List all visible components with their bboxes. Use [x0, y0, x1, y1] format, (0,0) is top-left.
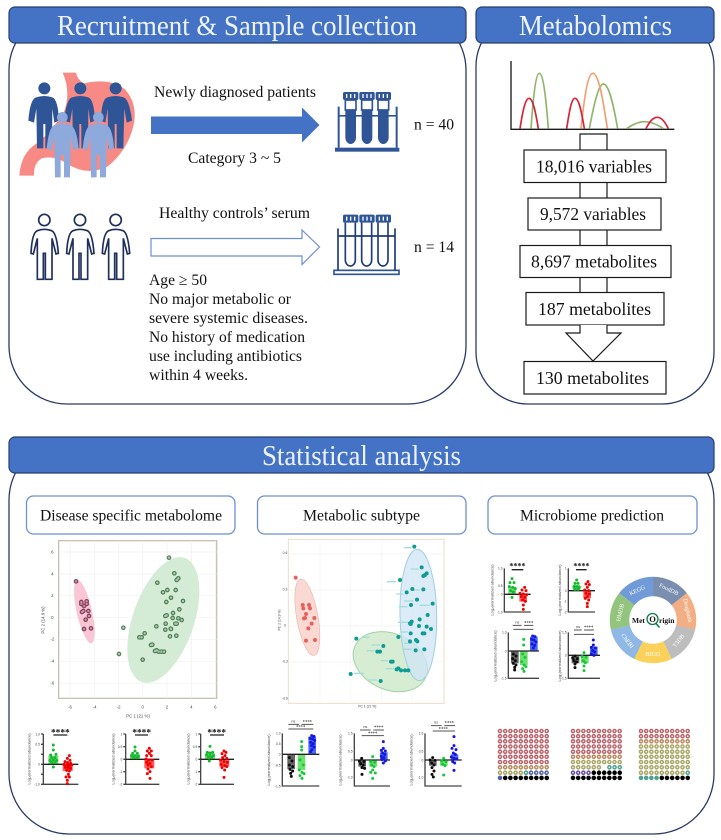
plot: subtype metabolite 1: 0 [279, 753, 281, 757]
plot: metabolite 1: **** [51, 729, 70, 739]
plot: microbiome metabolite 3: **** [524, 621, 534, 626]
plot: subtype metabolite 2: 0.5 [348, 749, 353, 753]
box: 18,016 variables: 18,016 variables [536, 156, 652, 176]
box: 130 metabolites [524, 362, 666, 394]
chart: PCA scatter, disease vs control: -6 [68, 704, 73, 709]
plot: subtype metabolite 2: Log₂(normalized abundance) [338, 734, 343, 786]
chart: microbiome prediction plots [489, 562, 600, 682]
plot: metabolite 2 [110, 729, 159, 787]
heading: metabolomics [476, 7, 714, 43]
chart: chromatogram [511, 61, 674, 129]
box: 130 metabolites: 130 metabolites [536, 368, 649, 388]
text: n = 14: n = 14 [414, 239, 454, 256]
heading: recruitment: Recruitment & Sample collection [57, 10, 417, 42]
plot: metabolite 1: 1.0 [35, 732, 40, 736]
icon: MetOrigin logo [632, 614, 675, 628]
plot: subtype metabolite 3: 0 [421, 758, 423, 762]
box: 8,697 metabolites: 8,697 metabolites [531, 252, 657, 272]
plot: metabolite 2: -2 [119, 783, 122, 787]
text: inclusion criteria: No major metabolic or [149, 291, 292, 308]
heading: statistical analysis [9, 437, 714, 473]
plot: metabolite 3: Log₂(normalized abundance) [185, 733, 190, 785]
chart: PCA scatter, disease vs control: 4 [190, 704, 193, 709]
chart: PCA scatter, disease vs control: 0 [51, 615, 54, 620]
plot: subtype metabolite 3: **** [439, 727, 449, 732]
icon: filled sample tubes [335, 92, 399, 152]
plot: subtype metabolite 3: 1.5 [419, 732, 423, 736]
subheading: metabolic subtype: Metabolic subtype [303, 508, 420, 524]
plot: subtype metabolite 1: ns [291, 718, 295, 723]
plot: microbiome metabolite 2: **** [573, 562, 589, 571]
plot: microbiome metabolite 1: 0.5 [498, 584, 503, 588]
plot: subtype metabolite 1: **** [296, 725, 306, 730]
arrow: controls to samples [151, 230, 320, 264]
plot: subtype metabolite 1 [266, 718, 319, 788]
plot: microbiome metabolite 4: 0 [565, 654, 567, 658]
plot: subtype metabolite 3: -1.0 [418, 775, 423, 779]
plot: microbiome metabolite 3: -1.5 [501, 677, 507, 681]
plot: subtype metabolite 1: -0.5 [275, 763, 281, 767]
plot: microbiome metabolite 1: Log₂(normalized abundance) [489, 564, 494, 616]
plot: subtype metabolite 2: 1.5 [348, 732, 353, 736]
plot: subtype metabolite 3: Log₂(normalized abundance) [408, 734, 413, 786]
plot: subtype metabolite 2: **** [368, 732, 378, 737]
panel: recruitment and sample collection [9, 7, 466, 404]
chart: MetOrigin database donut: BIGG [646, 652, 661, 658]
icon: outlined sample tubes [334, 215, 399, 274]
arrow: patients to samples [151, 108, 320, 142]
chart: MetOrigin database donut [606, 573, 700, 667]
plot: microbiome metabolite 4 [557, 624, 600, 682]
plot: microbiome metabolite 2: 1 [565, 567, 567, 571]
plot: metabolite 1 [27, 729, 78, 787]
chart: MetOrigin database donut: T3DB [672, 634, 686, 649]
plot: microbiome metabolite 4: -1.5 [561, 677, 567, 681]
flow connector [580, 134, 607, 293]
heading: metabolomics: Metabolomics [519, 10, 672, 42]
plot: metabolite 1: 0 [38, 763, 40, 767]
plot: microbiome metabolite 1: 0 [501, 593, 503, 597]
plot: microbiome metabolite 4: ns [576, 624, 580, 629]
chart: PCA scatter, disease vs control: PC 2 (14.9 %) [40, 606, 45, 634]
plot: microbiome metabolite 1: **** [509, 562, 525, 571]
text: category: Category 3 ~ 5 [188, 150, 281, 167]
text: newly diagnosed patients: Newly diagnosed patients [154, 84, 316, 101]
chart: disease box plots [27, 729, 234, 787]
plot: microbiome metabolite 3: ns [515, 619, 519, 624]
plot: metabolite 3: 1 [195, 732, 197, 736]
text: inclusion criteria: No history of medication [149, 329, 305, 346]
plot: metabolite 2: Log₂(normalized abundance) [110, 733, 115, 785]
matrix 1 [500, 731, 547, 778]
chart: PCA scatter, disease vs control: 4 [51, 571, 54, 576]
plot: subtype metabolite 3: ns [434, 720, 438, 725]
plot: microbiome metabolite 4: Log₂(normalized abundance) [557, 630, 562, 682]
subheading: microbiome prediction: Microbiome prediction [520, 508, 664, 524]
icon: MetOrigin logo: O [649, 614, 656, 624]
chart: PCA scatter, metabolic subtypes: 0 [284, 624, 286, 628]
plot: metabolite 2: 0 [120, 758, 122, 762]
plot: subtype metabolite 1: 0.5 [276, 742, 281, 746]
chart: PCA scatter, disease vs control: 6 [51, 549, 54, 554]
plot: microbiome metabolite 1: 1.0 [498, 567, 503, 571]
icon: stomach with patients [19, 73, 135, 177]
chart: PCA scatter, disease vs control: PC 1 (21 %) [126, 714, 150, 719]
box: 9,572 variables: 9,572 variables [540, 204, 646, 224]
chart: MetOrigin database donut: FoodDB [658, 583, 679, 597]
plot: microbiome metabolite 2: Log₂(normalized abundance) [557, 564, 562, 616]
plot: subtype metabolite 2: **** [374, 726, 384, 731]
plot: metabolite 1: Log₂(normalized abundance) [27, 733, 32, 785]
chart: PCA scatter, disease vs control: -2 [117, 704, 121, 709]
box: 9,572 variables [528, 198, 661, 230]
plot: microbiome metabolite 2: -1 [564, 600, 567, 604]
plot: microbiome metabolite 1: -1.0 [497, 610, 503, 614]
text: healthy controls: Healthy controls’ serum [159, 205, 311, 222]
text: inclusion criteria: Age ≥ 50 [149, 272, 207, 289]
chart: PCA scatter, metabolic subtypes: 0.3 [283, 588, 287, 592]
plot: metabolite 3: 0.5 [193, 745, 197, 749]
subheading: metabolic subtype [258, 496, 466, 534]
box: 187 metabolites: 187 metabolites [538, 299, 651, 319]
plot: subtype metabolite 2: 0 [351, 758, 353, 762]
chart: MetOrigin database donut: HMDB [616, 603, 626, 622]
plot: subtype metabolite 3 [408, 720, 462, 786]
plot: subtype metabolite 1: **** [303, 720, 313, 725]
plot: subtype metabolite 3: **** [445, 722, 455, 727]
plot: metabolite 2: 0.5 [118, 745, 122, 749]
ring highlights [500, 731, 688, 773]
icon: MetOrigin logo: Met [632, 616, 645, 625]
box: 18,016 variables [524, 150, 666, 182]
plot: metabolite 2: -1 [119, 770, 122, 774]
chart: PCA scatter, disease vs control: 2 [51, 593, 54, 598]
plot: microbiome metabolite 4: **** [584, 626, 594, 631]
chart: PCA scatter, disease vs control: -6 [50, 681, 55, 686]
plot: metabolite 2: 1 [120, 732, 122, 736]
box: 8,697 metabolites [520, 246, 671, 278]
plot: subtype metabolite 2: -1.0 [347, 775, 353, 779]
plot: microbiome metabolite 2: -2 [564, 610, 567, 614]
icon: MetOrigin logo: rigin [659, 616, 675, 625]
plot: subtype metabolite 2 [338, 724, 390, 786]
panel: statistical analysis [9, 437, 714, 834]
subheading: microbiome prediction [488, 496, 697, 534]
chart: PCA scatter, metabolic subtypes: 0.6 [283, 551, 287, 555]
chart: PCA scatter, disease vs control: -4 [50, 659, 55, 664]
chart: MetOrigin database donut: Drugbank [681, 598, 693, 623]
text: inclusion criteria: within 4 weeks. [149, 367, 248, 384]
plot: metabolite 3: -1 [194, 770, 197, 774]
chart: PCA scatter, metabolic subtypes: PC 1 (21 %) [358, 705, 376, 709]
plot: microbiome metabolite 3: Log₂(normalized abundance) [493, 630, 498, 682]
subheading: disease specific metabolome: Disease specific metabolome [40, 508, 222, 524]
plot: metabolite 3 [185, 729, 234, 787]
box: 187 metabolites [526, 292, 664, 325]
plot: subtype metabolite 2: ns [363, 724, 367, 729]
chart: PCA scatter, disease vs control: -4 [93, 704, 97, 709]
plot: metabolite 3: **** [207, 729, 226, 739]
text: n = 40: n = 40 [414, 116, 454, 134]
chart: PCA scatter, metabolic subtypes [278, 539, 444, 709]
chart: dot matrices [500, 731, 688, 778]
heading: statistical analysis: Statistical analysis [262, 441, 461, 472]
plot: microbiome metabolite 2: 0 [565, 589, 567, 593]
matrix 3 [641, 731, 688, 778]
plot: microbiome metabolite 3 [493, 619, 539, 682]
arrow: filter step [566, 325, 621, 361]
text: inclusion criteria: use including antibiotics [149, 348, 302, 365]
chart: MetOrigin database donut: KEGG [629, 584, 647, 597]
plot: metabolite 1: -1.0 [34, 783, 40, 787]
plot: microbiome metabolite 1 [489, 562, 531, 616]
chart: PCA scatter, metabolic subtypes: PC 2 (14.9 %) [278, 610, 282, 630]
plot: metabolite 2: **** [132, 729, 151, 739]
icon: healthy control outlines [31, 214, 130, 279]
chart: PCA scatter, metabolic subtypes: -0.6 [282, 696, 288, 700]
plot: metabolite 1: 0.5 [35, 743, 40, 747]
chart: PCA scatter, metabolic subtypes: -0.3 [282, 660, 288, 664]
text: inclusion criteria: severe systemic diseases. [149, 310, 308, 327]
plot: microbiome metabolite 3: 1.0 [502, 631, 507, 635]
plot: microbiome metabolite 4: 1.5 [562, 631, 567, 635]
plot: subtype metabolite 1: -1.5 [275, 784, 281, 788]
plot: subtype metabolite 3: 0.5 [419, 749, 423, 753]
chart: subtype bar plots [266, 718, 462, 788]
chart: PCA scatter, disease vs control [40, 541, 217, 719]
chart: PCA scatter, disease vs control: 6 [214, 704, 217, 709]
chart: MetOrigin database donut: ChEBI [619, 633, 634, 650]
plot: subtype metabolite 1: 1.0 [276, 732, 281, 736]
chart: PCA scatter, disease vs control: 2 [166, 704, 169, 709]
plot: metabolite 3: 0 [195, 758, 197, 762]
chart: PCA scatter, disease vs control: 0 [141, 704, 144, 709]
plot: metabolite 3: -2 [194, 783, 197, 787]
plot: microbiome metabolite 3: 0 [505, 649, 507, 653]
chart: PCA scatter, disease vs control: -2 [50, 637, 55, 642]
text: inclusion criteria [149, 272, 308, 384]
panel: metabolomics [476, 7, 714, 404]
subheading: disease specific metabolome [26, 496, 235, 534]
matrix 2 [573, 731, 620, 778]
plot: microbiome metabolite 2 [557, 562, 595, 616]
plot: subtype metabolite 1: Log₂(normalized abundance) [266, 734, 271, 786]
